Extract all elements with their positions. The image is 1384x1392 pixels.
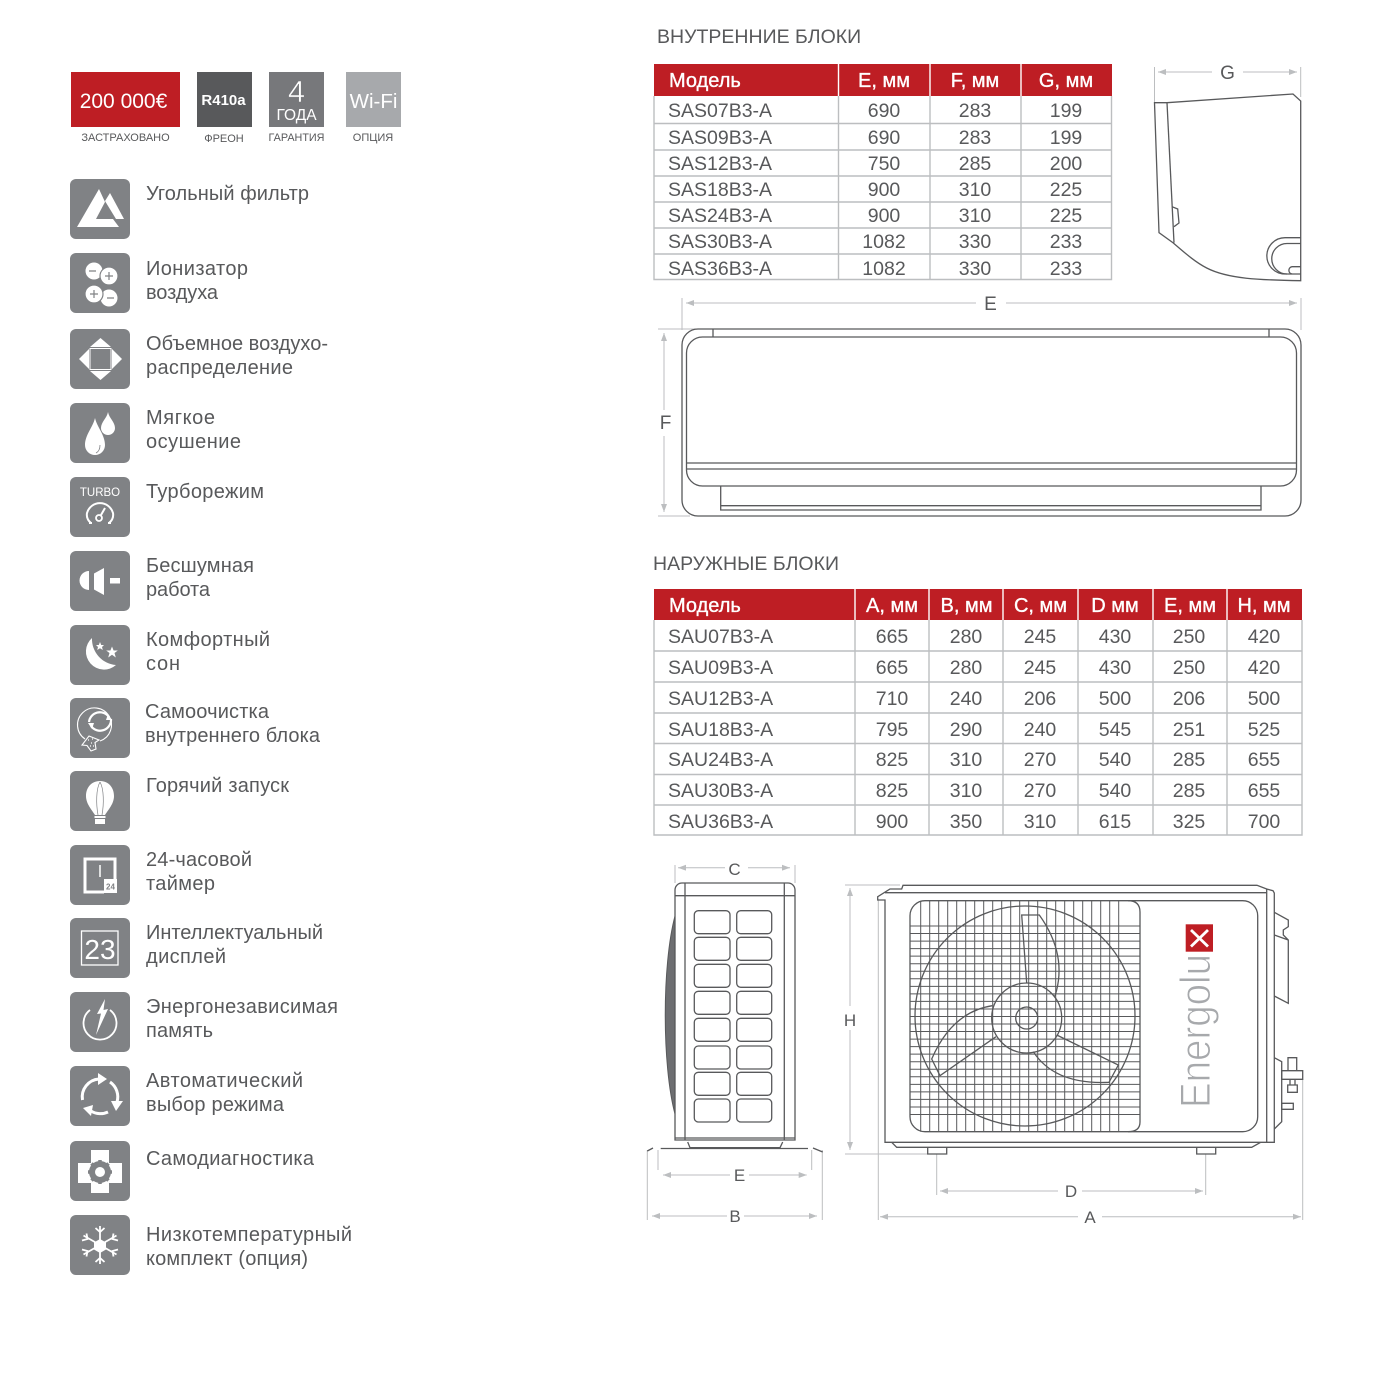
diagram: outdoor unit front view with H, D and A dimensions: H (844, 1011, 856, 1030)
table: outdoor units: 430 (1099, 657, 1131, 679)
table: outdoor units: SAU09B3-A (668, 657, 773, 679)
table: outdoor units: 795 (876, 719, 908, 741)
icon: hot air balloon (70, 771, 130, 831)
badge: Wi-Fi option: Wi-Fi (350, 90, 397, 113)
table: outdoor units: 700 (1248, 811, 1280, 833)
feature: comfortable sleep: сон (146, 653, 180, 675)
icon: self-cleaning circle with arrow (70, 698, 130, 758)
icon: display showing 23 (70, 918, 130, 978)
table: outdoor units: 655 (1248, 780, 1280, 802)
table: outdoor units: 250 (1173, 626, 1205, 648)
table: indoor units: 225 (1050, 179, 1082, 201)
table: indoor units: 283 (959, 100, 991, 122)
feature: non-volatile memory: память (146, 1020, 213, 1042)
feature: 24-hour timer (70, 845, 252, 905)
feature: automatic mode selection: Автоматический (146, 1070, 303, 1092)
feature: indoor unit self-cleaning: внутреннего блока (145, 725, 321, 747)
icon: turbo gauge (70, 477, 130, 537)
table: indoor units: 285 (959, 153, 991, 175)
feature: intelligent display: дисплей (146, 946, 226, 968)
table: outdoor units: 250 (1173, 657, 1205, 679)
table: outdoor units: 290 (950, 719, 982, 741)
feature: turbo mode (70, 477, 264, 537)
table: indoor units: SAS12B3-A (668, 153, 772, 175)
feature: silent operation (70, 551, 254, 611)
table: indoor units: 1082 (862, 258, 906, 280)
diagram: outdoor unit side view with C, E and B dimensions: C (728, 860, 741, 879)
diagram: indoor unit front view with E and F dimensions (658, 294, 1301, 516)
table: indoor units: Модель (669, 70, 741, 92)
feature: low-temperature kit (70, 1215, 352, 1275)
table: outdoor units: Н, мм (1237, 595, 1291, 617)
table: indoor units (654, 64, 1112, 280)
feature: self-diagnostics (70, 1141, 315, 1201)
icon: timer with 24 (70, 845, 130, 905)
table: indoor units: SAS36B3-A (668, 258, 772, 280)
icon: four arrows around a square (70, 329, 130, 389)
table: outdoor units: 500 (1099, 688, 1131, 710)
table: outdoor units: 206 (1173, 688, 1205, 710)
table: indoor units: 199 (1050, 127, 1082, 149)
diagram: outdoor unit side view with C, E and B dimensions (647, 860, 823, 1226)
table: outdoor units: 270 (1024, 749, 1056, 771)
badge: 4 year warranty: 4 (288, 74, 305, 109)
table: outdoor units: 825 (876, 780, 908, 802)
table: outdoor units: SAU24B3-A (668, 749, 773, 771)
table: outdoor units: 430 (1099, 626, 1131, 648)
table: outdoor units: 540 (1099, 780, 1131, 802)
feature: low-temperature kit: Низкотемпературный (146, 1224, 352, 1246)
heading: indoor units: ВНУТРЕННИЕ БЛОКИ (657, 26, 861, 48)
table: outdoor units: 240 (950, 688, 982, 710)
table: indoor units: 233 (1050, 231, 1082, 253)
feature: hot start (70, 771, 289, 831)
table: indoor units: SAS24B3-A (668, 205, 772, 227)
table: outdoor units: 325 (1173, 811, 1205, 833)
icon: crescent moon and stars (70, 625, 130, 685)
feature: intelligent display: Интеллектуальный (146, 922, 323, 944)
table: outdoor units: 500 (1248, 688, 1280, 710)
feature: carbon filter (70, 179, 309, 239)
table: indoor units: 225 (1050, 205, 1082, 227)
table: outdoor units: 615 (1099, 811, 1131, 833)
table: indoor units: SAS09B3-A (668, 127, 772, 149)
table: outdoor units: 285 (1173, 780, 1205, 802)
feature: 24-hour timer: 24-часовой (146, 849, 252, 871)
table: outdoor units: 655 (1248, 749, 1280, 771)
feature: comfortable sleep (70, 625, 270, 685)
badge: insured 200 000 euro: ЗАСТРАХОВАНО (81, 132, 170, 144)
table: outdoor units: 350 (950, 811, 982, 833)
feature: indoor unit self-cleaning (70, 698, 321, 758)
diagram: outdoor unit side view with C, E and B dimensions: B (729, 1207, 741, 1226)
table: outdoor units: 540 (1099, 749, 1131, 771)
table: outdoor units: SAU07B3-A (668, 626, 773, 648)
table: indoor units: 233 (1050, 258, 1082, 280)
table: indoor units: F, мм (951, 70, 999, 92)
table: outdoor units: В, мм (941, 595, 992, 617)
icon: turbo gauge: TURBO (80, 487, 120, 499)
table: outdoor units: С, мм (1014, 595, 1067, 617)
feature: automatic mode selection: выбор режима (146, 1094, 285, 1116)
table: indoor units: 900 (868, 205, 900, 227)
table: indoor units: SAS18B3-A (668, 179, 772, 201)
table: outdoor units: 545 (1099, 719, 1131, 741)
feature: carbon filter: Угольный фильтр (146, 183, 309, 205)
badge: R410a refrigerant: ФРЕОН (204, 133, 244, 145)
table: indoor units: 310 (959, 205, 991, 227)
table: outdoor units: SAU18B3-A (668, 719, 773, 741)
feature: soft dehumidification: Мягкое (146, 407, 215, 429)
diagram: outdoor unit front view with H, D and A dimensions: D (1065, 1182, 1077, 1201)
feature: 3D air distribution: Объемное воздухо- (146, 333, 328, 355)
table: outdoor units: А, мм (866, 595, 918, 617)
diagram: outdoor unit side view with C, E and B dimensions: E (734, 1166, 745, 1185)
feature: intelligent display (70, 918, 323, 978)
icon: carbon filter triangles (70, 179, 130, 239)
diagram: indoor unit front view with E and F dimensions: F (660, 413, 671, 434)
table: outdoor units: SAU12B3-A (668, 688, 773, 710)
table: outdoor units: 245 (1024, 626, 1056, 648)
table: indoor units: 330 (959, 258, 991, 280)
icon: cross with gear (70, 1141, 130, 1201)
badge: R410a refrigerant: R410a (201, 92, 246, 109)
feature: silent operation: Бесшумная (146, 555, 254, 577)
table: outdoor units: 280 (950, 626, 982, 648)
feature: air ionizer: Ионизатор (146, 258, 248, 280)
table: outdoor units: 825 (876, 749, 908, 771)
icon: three circular arrows (70, 1066, 130, 1126)
table: outdoor units: 251 (1173, 719, 1205, 741)
feature: air ionizer: воздуха (146, 282, 219, 304)
brand logo: Energolu (1172, 954, 1220, 1108)
table: outdoor units: Модель (669, 595, 741, 617)
table: indoor units: 690 (868, 100, 900, 122)
table: outdoor units: Е, мм (1164, 595, 1216, 617)
table: indoor units: 750 (868, 153, 900, 175)
table: indoor units: 283 (959, 127, 991, 149)
feature: 24-hour timer: таймер (146, 873, 215, 895)
table: outdoor units: 280 (950, 657, 982, 679)
table: outdoor units: 525 (1248, 719, 1280, 741)
feature: soft dehumidification: осушение (146, 431, 241, 453)
table: outdoor units: 310 (1024, 811, 1056, 833)
icon: water drops (70, 403, 130, 463)
icon: speaker with minus (70, 551, 130, 611)
table: indoor units: 200 (1050, 153, 1082, 175)
feature: non-volatile memory: Энергонезависимая (146, 996, 338, 1018)
table: outdoor units: 420 (1248, 657, 1280, 679)
table: indoor units: 310 (959, 179, 991, 201)
feature: self-diagnostics: Самодиагностика (146, 1148, 315, 1170)
table: outdoor units (654, 589, 1302, 835)
table: outdoor units: 420 (1248, 626, 1280, 648)
diagram: indoor unit side view with G dimension: G (1220, 63, 1235, 84)
table: outdoor units: 310 (950, 780, 982, 802)
feature: air ionizer (70, 253, 248, 313)
feature: 3D air distribution: распределение (146, 357, 293, 379)
feature: silent operation: работа (146, 579, 211, 601)
feature: comfortable sleep: Комфортный (146, 629, 270, 651)
icon: timer with 24: 24 (106, 882, 115, 892)
table: indoor units: 900 (868, 179, 900, 201)
table: outdoor units: 900 (876, 811, 908, 833)
table: outdoor units: D мм (1091, 595, 1139, 617)
table: outdoor units: 665 (876, 626, 908, 648)
table: indoor units: E, мм (858, 70, 910, 92)
table: outdoor units: 310 (950, 749, 982, 771)
heading: outdoor units: НАРУЖНЫЕ БЛОКИ (653, 553, 839, 575)
table: outdoor units: 245 (1024, 657, 1056, 679)
icon: ionizer plus and minus (70, 253, 130, 313)
feature: automatic mode selection (70, 1066, 303, 1126)
table: indoor units: SAS30B3-A (668, 231, 772, 253)
feature: indoor unit self-cleaning: Самоочистка (145, 701, 270, 723)
table: indoor units: 330 (959, 231, 991, 253)
badge: 4 year warranty (269, 72, 324, 144)
diagram: indoor unit side view with G dimension (1154, 63, 1301, 281)
diagram: outdoor unit front view with H, D and A dimensions: A (1084, 1208, 1096, 1227)
table: indoor units: SAS07B3-A (668, 100, 772, 122)
icon: snowflake (70, 1215, 130, 1275)
table: outdoor units: SAU36B3-A (668, 811, 773, 833)
badge: insured 200 000 euro (71, 72, 180, 144)
fan guard grid (910, 901, 1140, 1132)
table: indoor units: G, мм (1039, 70, 1093, 92)
feature: hot start: Горячий запуск (146, 775, 289, 797)
badge: R410a refrigerant (197, 72, 252, 145)
table: outdoor units: 710 (876, 688, 908, 710)
badge: 4 year warranty: ГОДА (276, 107, 317, 124)
table: indoor units: 690 (868, 127, 900, 149)
icon: power button with lightning (70, 992, 130, 1052)
badge: Wi-Fi option (346, 72, 401, 144)
table: outdoor units: SAU30B3-A (668, 780, 773, 802)
feature: 3D air distribution (70, 329, 328, 389)
diagram: indoor unit front view with E and F dimensions: E (984, 294, 997, 315)
badge: 4 year warranty: ГАРАНТИЯ (269, 132, 324, 144)
feature: low-temperature kit: комплект (опция) (146, 1248, 308, 1270)
table: indoor units: 1082 (862, 231, 906, 253)
feature: non-volatile memory (70, 992, 338, 1052)
table: outdoor units: 270 (1024, 780, 1056, 802)
table: outdoor units: 285 (1173, 749, 1205, 771)
feature: turbo mode: Турборежим (146, 481, 264, 503)
feature: soft dehumidification (70, 403, 241, 463)
badge: insured 200 000 euro: 200 000€ (80, 90, 168, 113)
badge: Wi-Fi option: ОПЦИЯ (353, 132, 393, 144)
table: outdoor units: 665 (876, 657, 908, 679)
table: outdoor units: 206 (1024, 688, 1056, 710)
icon: display showing 23: 23 (84, 934, 116, 965)
table: indoor units: 199 (1050, 100, 1082, 122)
table: outdoor units: 240 (1024, 719, 1056, 741)
diagram: outdoor unit front view with H, D and A dimensions (844, 885, 1303, 1227)
